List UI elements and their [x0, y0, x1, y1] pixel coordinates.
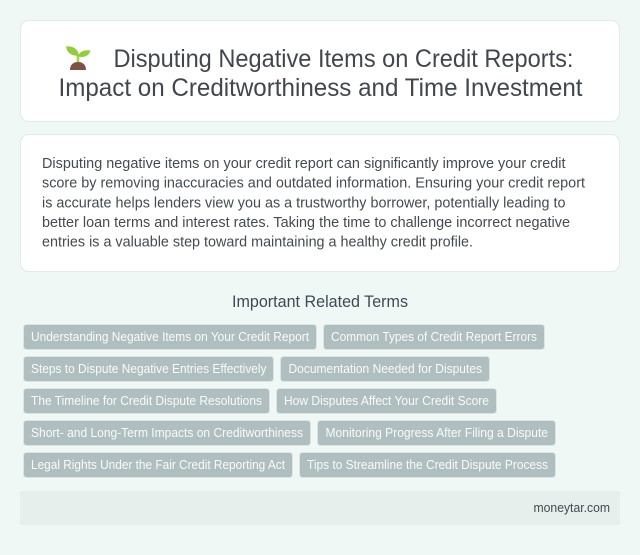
tag: timeline: The Timeline for Credit Dispute Resolutions	[31, 393, 262, 408]
tag: short and long term impacts	[24, 420, 310, 446]
panel: introduction: is accurate helps lenders view you as a trustworthy borrower, potentially leading to	[42, 195, 566, 211]
panel: introduction: score by removing inaccuracies and outdated information. Ensuring your credit report	[42, 176, 585, 192]
tag: how disputes affect score	[276, 388, 496, 414]
icon: seedling	[66, 46, 90, 70]
tag: tips to streamline	[300, 452, 556, 478]
tag: documentation needed: Documentation Needed for Disputes	[288, 361, 482, 376]
tag: tips to streamline: Tips to Streamline the Credit Dispute Process	[307, 457, 548, 472]
tag: how disputes affect score: How Disputes Affect Your Credit Score	[284, 393, 489, 408]
panel: related term tags	[24, 324, 556, 478]
tag: legal rights	[24, 452, 292, 478]
footer: moneytar.com	[534, 501, 610, 515]
tag: common types of errors	[324, 324, 544, 350]
tag: understanding negative items	[24, 324, 316, 350]
tag: timeline	[24, 388, 270, 414]
footer	[20, 491, 620, 525]
tag: documentation needed	[280, 356, 490, 382]
tag: monitoring progress: Monitoring Progress After Filing a Dispute	[326, 425, 548, 440]
panel: header: Impact on Creditworthiness and Time Investment	[58, 74, 583, 102]
tag: understanding negative items: Understanding Negative Items on Your Credit Report	[31, 329, 309, 344]
panel: introduction: entries is a valuable step toward maintaining a healthy credit profile.	[42, 234, 473, 250]
panel: introduction: Disputing negative items on your credit report can significantly improve your credit	[42, 156, 566, 172]
title: Disputing Negative Items on Credit Reports:	[114, 45, 574, 73]
panel: header	[20, 20, 620, 122]
tag: steps to dispute: Steps to Dispute Negative Entries Effectively	[31, 361, 267, 376]
tag: legal rights: Legal Rights Under the Fair Credit Reporting Act	[31, 457, 285, 472]
panel: introduction	[20, 134, 620, 272]
heading: related terms: Important Related Terms	[232, 293, 408, 311]
tag: short and long term impacts: Short- and Long-Term Impacts on Creditworthiness	[31, 425, 303, 440]
tag: steps to dispute	[24, 356, 274, 382]
panel: introduction: better loan terms and interest rates. Taking the time to challenge incorrect negative	[42, 215, 570, 231]
tag: common types of errors: Common Types of Credit Report Errors	[331, 329, 537, 344]
tag: monitoring progress	[318, 420, 556, 446]
